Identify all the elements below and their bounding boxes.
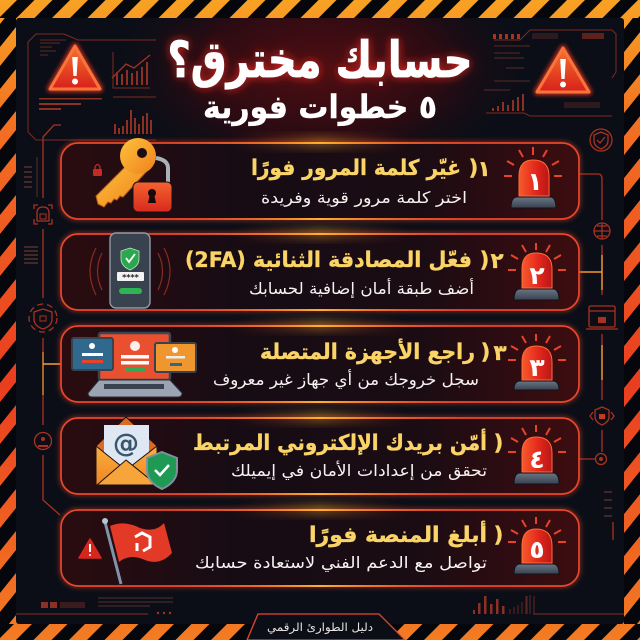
left HUD panel — [28, 34, 156, 140]
icon: phone with shield: **** — [122, 273, 140, 282]
icon: siren 5 — [508, 517, 566, 574]
right circuit with icons — [579, 129, 618, 540]
heading: step 1: ) — [469, 156, 478, 181]
icon: flag — [79, 518, 172, 584]
panel: step 2 — [61, 228, 579, 311]
heading: step 5: أبلغ المنصة فورًا — [309, 520, 487, 548]
text: step 2 description: أضف طبقة أمان إضافية لحسابك — [249, 278, 474, 298]
heading: step 4: أمّن بريدك الإلكتروني المرتبط — [193, 428, 487, 456]
panel: step 3 — [61, 320, 579, 403]
text: step 4 description: تحقق من إعدادات الأمان في إيميلك — [231, 460, 487, 481]
panel: step 1 — [61, 137, 579, 220]
icon: siren 1: ١ — [527, 167, 543, 196]
heading: step 3: ) — [481, 340, 490, 365]
title: حسابك مخترق؟ — [168, 31, 472, 90]
text: step 5 description: تواصل مع الدعم الفني لاستعادة حسابك — [195, 553, 487, 573]
bottom HUD left — [16, 598, 173, 614]
heading: step 4: ) — [494, 431, 503, 456]
heading: step 2: ) — [480, 248, 489, 273]
bottom HUD right — [473, 595, 624, 614]
warning triangle right — [537, 48, 589, 92]
panel: step 4 — [61, 412, 579, 495]
footer text: دليل الطوارئ الرقمي — [267, 620, 373, 635]
icon: phone with shield — [90, 233, 170, 308]
icon: siren 3: ٣ — [529, 353, 545, 382]
right HUD panel — [484, 30, 616, 116]
icon: siren 3 — [508, 334, 566, 390]
text: step 3 description: سجل خروجك من أي جهاز غير معروف — [213, 369, 479, 390]
icon: laptop and tablets — [72, 333, 196, 397]
footer tab — [247, 614, 405, 640]
panel: step 5 — [61, 504, 579, 587]
heading: step 2: ٢ — [490, 249, 504, 274]
icon: siren 2 — [508, 243, 566, 300]
heading: step 1: ١ — [477, 157, 491, 182]
heading: step 5: ) — [494, 523, 503, 548]
heading: step 2: فعّل المصادقة الثنائية (2FA) — [185, 248, 472, 273]
left circuit with icons — [24, 125, 61, 515]
heading: step 3: ٣ — [493, 341, 507, 366]
icon: key and padlock — [93, 138, 172, 212]
icon: siren 4 — [508, 425, 566, 484]
heading: step 3: راجع الأجهزة المتصلة — [260, 337, 475, 365]
heading: step 1: غيّر كلمة المرور فورًا — [251, 156, 461, 181]
icon: siren 4: ٤ — [529, 445, 545, 474]
text: step 1 description: اختر كلمة مرور قوية وفريدة — [261, 188, 467, 208]
icon: envelope with shield: @ — [113, 429, 139, 459]
icon: siren 1 — [504, 147, 562, 208]
subtitle: ٥ خطوات فورية — [203, 88, 437, 126]
icon: envelope with shield — [96, 417, 177, 489]
icon: siren 5: ٥ — [529, 535, 545, 564]
icon: siren 2: ٢ — [529, 261, 545, 290]
warning triangle left — [50, 46, 100, 89]
